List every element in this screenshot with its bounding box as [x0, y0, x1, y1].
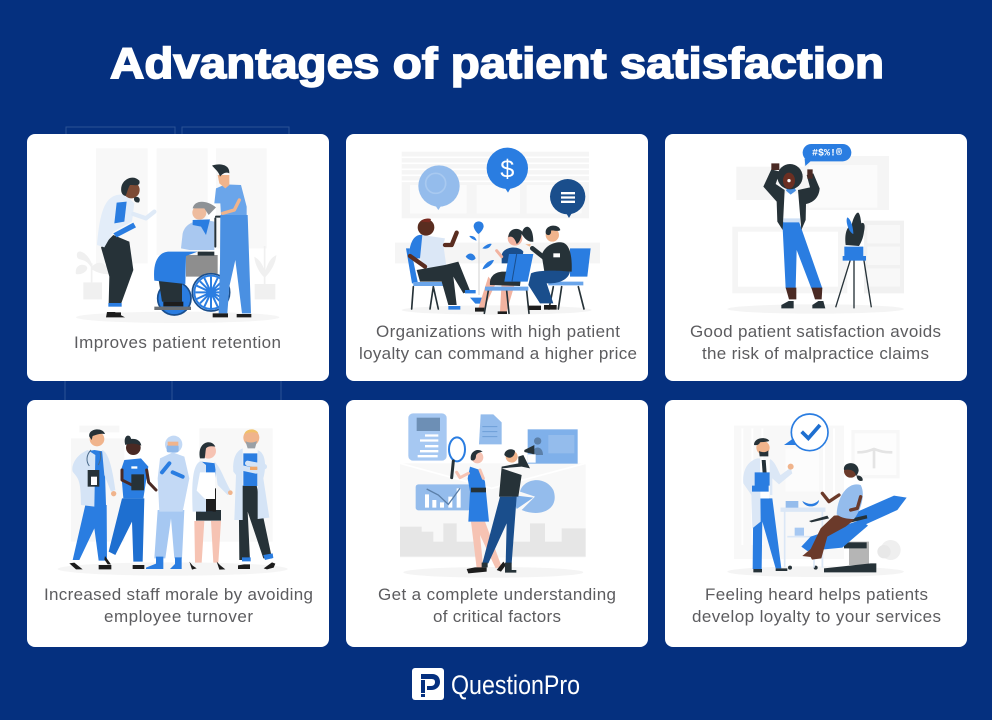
- doctor: [743, 438, 794, 572]
- illustration: frustrated woman and plant: [727, 144, 904, 314]
- woman in centre: [475, 227, 533, 314]
- panel: high patient loyalty price: [346, 134, 648, 381]
- caption: loyalty can command a higher price: [359, 344, 637, 363]
- older doctor with crossed arms: [233, 429, 275, 569]
- caption: Improves patient retention: [74, 333, 281, 352]
- illustration: three people in waiting room with speech bubbles: [395, 148, 600, 315]
- caption: [692, 585, 941, 626]
- caption: employee turnover: [104, 607, 253, 626]
- surgeon: [146, 436, 189, 569]
- document: profile card: [528, 429, 578, 464]
- illustration: doctor and patient on exam chair: [727, 414, 907, 577]
- caption: Increased staff morale by avoiding: [44, 585, 313, 604]
- illustration: five medical staff: [58, 426, 288, 576]
- panel: feeling heard: [665, 400, 967, 647]
- plant: [466, 221, 494, 304]
- examination chair: [801, 496, 907, 572]
- patient: [802, 463, 863, 560]
- speech bubble: dollar: $: [500, 156, 514, 184]
- caption: develop loyalty to your services: [692, 607, 941, 626]
- caption: Feeling heard helps patients: [705, 585, 928, 604]
- woman in blue dress: [457, 450, 506, 573]
- speech bubble: light: [418, 165, 460, 210]
- panel: increased staff morale: [27, 400, 329, 647]
- man with telescope: [482, 445, 536, 573]
- caption: the risk of malpractice claims: [702, 344, 929, 363]
- instrument cart: [781, 500, 825, 570]
- logo: QuestionPro: [412, 668, 580, 700]
- speech bubble: curse symbols: [803, 144, 851, 166]
- wheelchair patient: [154, 202, 230, 315]
- document: page: [479, 414, 502, 444]
- magnifying glass: [449, 437, 465, 478]
- man on left: [406, 219, 476, 310]
- logo wordmark: QuestionPro: [451, 670, 580, 700]
- nurse: [212, 164, 251, 317]
- pie chart: [512, 480, 555, 513]
- illustration: research with documents and charts: [400, 413, 586, 578]
- caption: Organizations with high patient: [376, 322, 620, 341]
- caption: [690, 322, 941, 363]
- caption: Good patient satisfaction avoids: [690, 322, 941, 341]
- speech bubble: text lines: [550, 179, 585, 218]
- caption: [359, 322, 637, 363]
- illustration: doctor, patient in wheelchair and nurse: [76, 148, 279, 323]
- logo icon: [412, 668, 444, 700]
- man on right: [525, 226, 591, 310]
- speech bubble: dollar: [487, 148, 528, 193]
- document: report: [408, 413, 447, 461]
- caption: [44, 585, 313, 626]
- doctor in skirt: [189, 442, 233, 570]
- title: Advantages of patient satisfaction: [110, 39, 884, 88]
- caption: of critical factors: [433, 607, 561, 626]
- nurse with clipboard: [104, 436, 156, 569]
- caption: Get a complete understanding: [378, 585, 616, 604]
- bar and line chart: [416, 484, 471, 510]
- panel: improves patient retention: [27, 134, 329, 381]
- caption: [378, 585, 616, 626]
- doctor: [97, 178, 154, 317]
- stool with plant: [836, 213, 871, 308]
- speech bubble: check mark: [784, 414, 828, 451]
- woman: [763, 163, 825, 308]
- panel: complete understanding: [346, 400, 648, 647]
- panel: avoids malpractice claims: [665, 134, 967, 381]
- doctor with stethoscope: [69, 429, 116, 569]
- speech bubble: curse symbols: #$%!®: [812, 148, 842, 159]
